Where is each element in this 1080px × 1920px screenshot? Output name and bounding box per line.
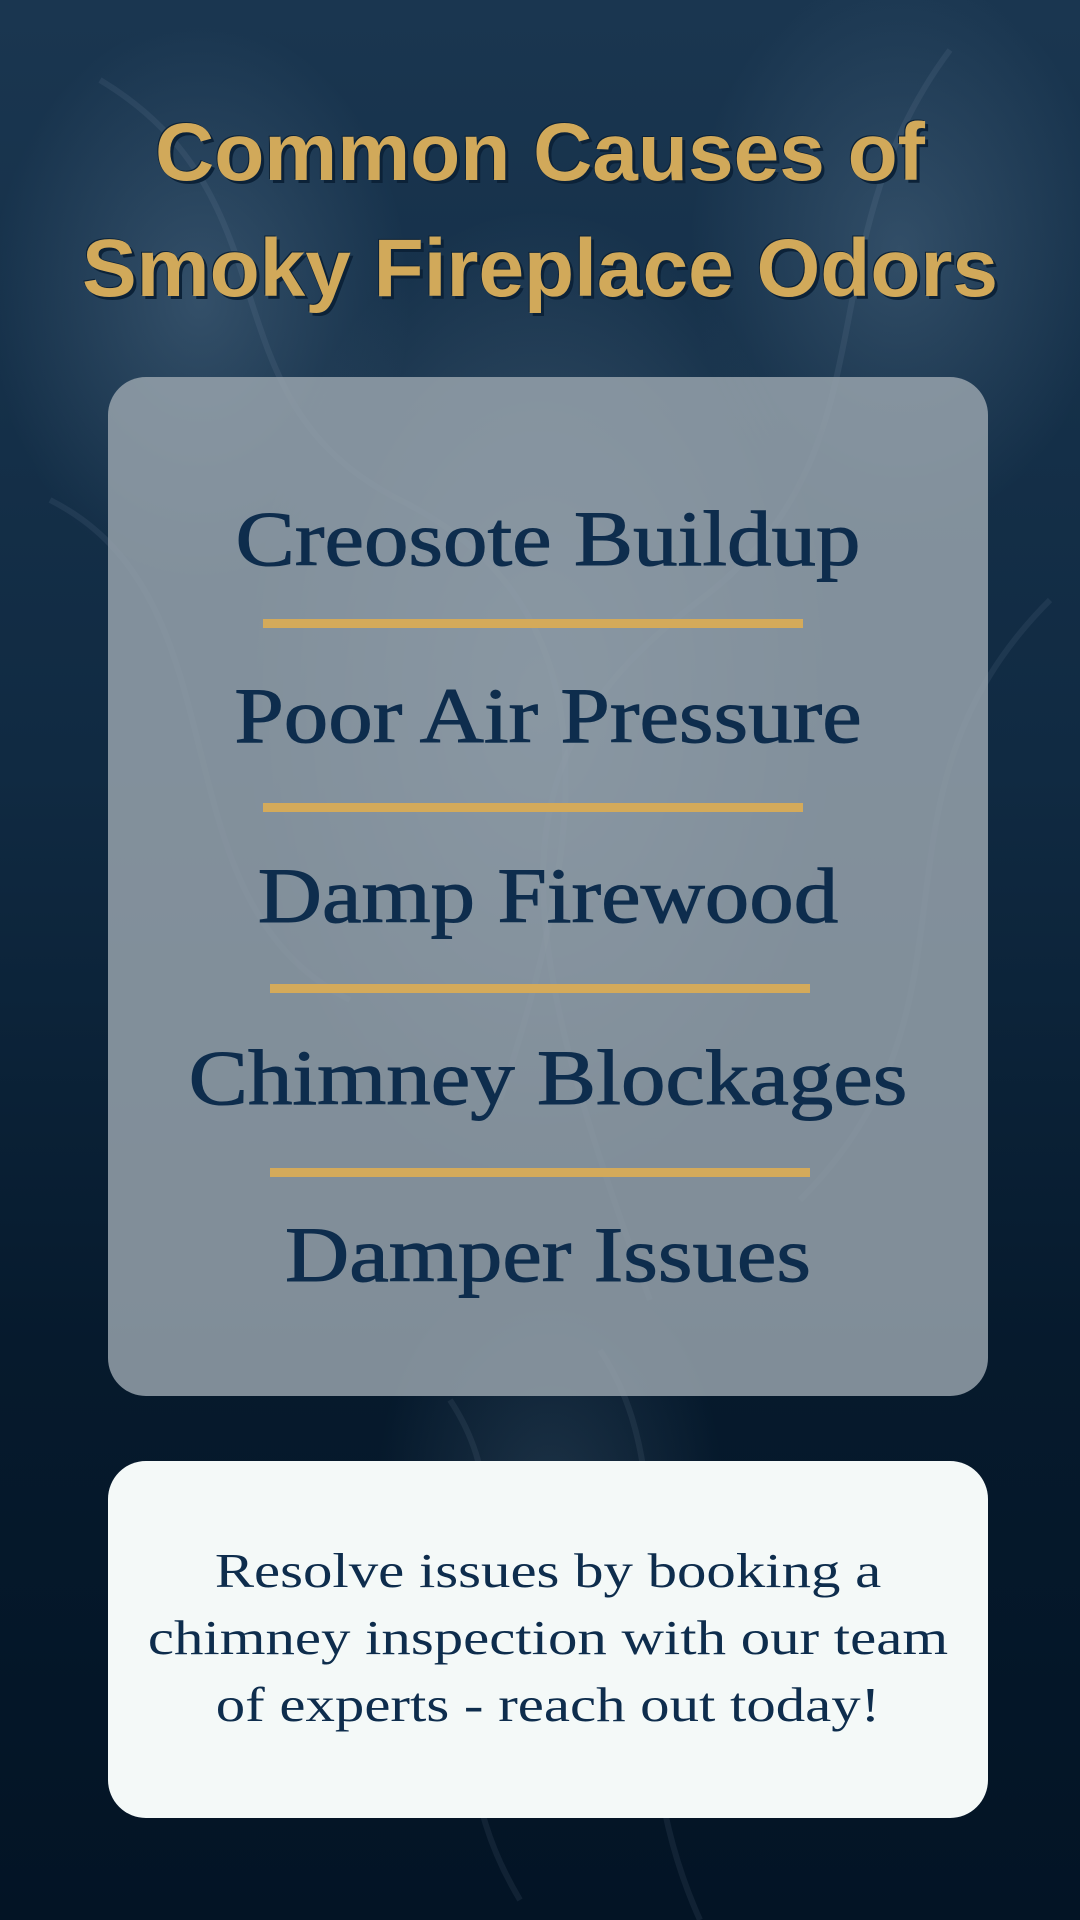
item: damper issues: Damper Issues xyxy=(285,1211,811,1298)
callout: booking inspection: Resolve issues by booking a xyxy=(215,1543,881,1598)
divider line xyxy=(270,1168,810,1177)
item: damp firewood: Damp Firewood xyxy=(258,852,838,939)
divider line xyxy=(263,803,803,812)
item: creosote buildup: Creosote Buildup xyxy=(236,495,860,582)
title: Smoky Fireplace Odors xyxy=(82,223,998,314)
divider line xyxy=(263,619,803,628)
callout: booking inspection xyxy=(108,1461,988,1818)
item: chimney blockages: Chimney Blockages xyxy=(189,1034,907,1121)
item: poor air pressure: Poor Air Pressure xyxy=(234,672,862,759)
callout: booking inspection: of experts - reach out today! xyxy=(216,1677,880,1732)
title: Common Causes of xyxy=(155,107,925,198)
title xyxy=(82,107,998,316)
divider line xyxy=(270,984,810,993)
panel: causes list xyxy=(108,377,988,1396)
callout: booking inspection: chimney inspection with our team xyxy=(148,1610,948,1665)
